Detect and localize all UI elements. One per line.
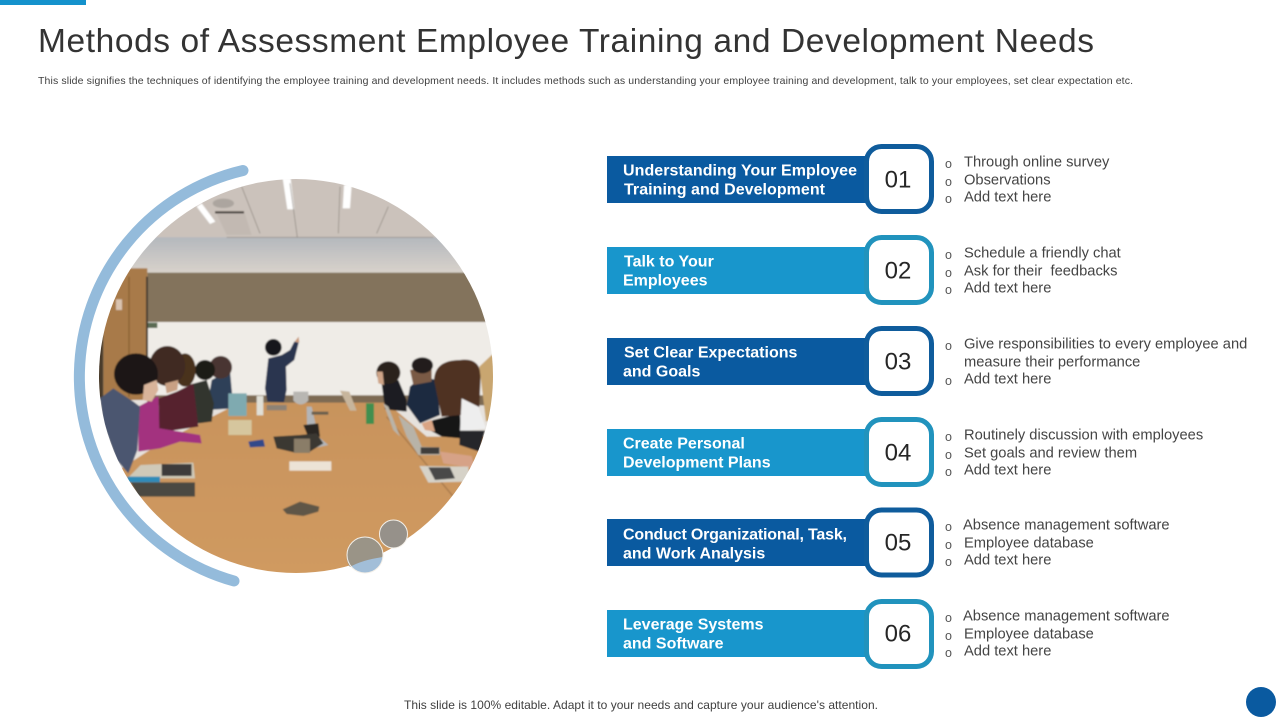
bullet list 6: Absence management software xyxy=(963,608,1170,624)
page marker dot xyxy=(1246,687,1276,717)
label bar 4 xyxy=(607,429,870,476)
subtitle: This slide signifies the techniques of identifying the employee training and development needs. It includes methods such as understanding your employee training and development, talk to your employees, set clear expectation etc. xyxy=(38,75,1133,87)
bullet list 3 xyxy=(945,336,1247,388)
bullet list 5: o xyxy=(945,520,952,534)
row 4 xyxy=(607,420,1203,484)
label bar 6 xyxy=(607,610,870,657)
label bar 6: and Software xyxy=(623,636,724,652)
bullet list 6 xyxy=(945,608,1170,660)
number box 03 xyxy=(866,328,932,394)
bullet list 2: Add text here xyxy=(964,280,1051,296)
bullet list 1 xyxy=(945,154,1110,206)
bullet list 3: measure their performance xyxy=(964,354,1140,370)
row 3 xyxy=(607,328,1247,394)
label bar 1 xyxy=(607,156,870,203)
label bar 3: Set Clear Expectations xyxy=(624,344,798,362)
items on table xyxy=(228,420,252,435)
bullet list 1: Observations xyxy=(964,172,1051,188)
label bar 2 xyxy=(607,247,870,294)
label bar 3: and Goals xyxy=(623,364,700,380)
bullet list 1: o xyxy=(945,175,952,189)
number box 04 xyxy=(866,420,932,484)
bullet list 6: Employee database xyxy=(964,626,1094,642)
label bar 5 xyxy=(607,519,870,566)
number box 06: 06 xyxy=(885,620,911,648)
bullet list 5: Absence management software xyxy=(963,517,1170,533)
label bar 3 xyxy=(607,338,870,385)
bullet list 2 xyxy=(945,245,1121,297)
bullet list 5 xyxy=(945,517,1170,569)
people right xyxy=(340,391,357,411)
number box 04: 04 xyxy=(885,440,911,466)
table xyxy=(122,402,484,573)
row 5 xyxy=(607,510,1170,575)
bullet list 2: o xyxy=(945,283,952,297)
bullet list 5: Employee database xyxy=(964,535,1094,551)
bullet list 3: Add text here xyxy=(964,371,1051,387)
row 1 xyxy=(607,146,1110,212)
title: Methods of Assessment Employee Training and Development Needs xyxy=(38,23,1094,60)
bullet list 3: Give responsibilities to every employee and xyxy=(964,336,1247,352)
people left xyxy=(208,372,233,410)
laptop left xyxy=(127,463,195,478)
number box 01: 01 xyxy=(885,166,911,194)
photo panel: meeting room xyxy=(79,170,500,583)
label bar 6: Leverage Systems xyxy=(623,616,764,634)
bullet list 1: Add text here xyxy=(964,189,1051,205)
label bar 4: Development Plans xyxy=(623,454,771,472)
bullet list 2: o xyxy=(945,248,952,262)
bullet list 4 xyxy=(945,427,1203,479)
number box 02 xyxy=(866,238,932,302)
label bar 4: Create Personal xyxy=(623,436,745,452)
decorative small circles xyxy=(347,520,408,573)
bullet list 4: o xyxy=(945,465,952,479)
bullet list 1: o xyxy=(945,192,952,206)
row 2 xyxy=(607,238,1121,302)
bullet list 3: o xyxy=(945,374,952,388)
bullet list 4: o xyxy=(945,430,952,444)
label bar 1: Training and Development xyxy=(624,182,826,198)
number box 05: 05 xyxy=(885,530,911,556)
bullet list 4: o xyxy=(945,448,952,462)
row 6 xyxy=(607,602,1170,666)
label bar 2: Employees xyxy=(623,272,708,290)
presenter xyxy=(265,342,299,402)
label bar 2: Talk to Your xyxy=(624,254,714,270)
bullet list 5: o xyxy=(945,555,952,569)
label bar 5: and Work Analysis xyxy=(623,546,765,562)
bullet list 1: o xyxy=(945,157,952,171)
bullet list 6: o xyxy=(945,646,952,660)
bullet list 3: o xyxy=(945,339,952,353)
label bar 1: Understanding Your Employee xyxy=(623,162,857,180)
label bar 5: Conduct Organizational, Task, xyxy=(623,526,847,544)
room xyxy=(100,399,488,468)
top accent bar xyxy=(0,0,86,5)
bullet list 6: Add text here xyxy=(964,643,1051,659)
number box 02: 02 xyxy=(885,258,911,284)
number box 01 xyxy=(866,146,932,212)
footer note: This slide is 100% editable. Adapt it to your needs and capture your audience's attention. xyxy=(404,698,878,712)
bullet list 2: Ask for their feedbacks xyxy=(964,263,1117,279)
bullet list 5: Add text here xyxy=(964,552,1051,568)
decorative arc xyxy=(79,170,243,581)
bullet list 4: Add text here xyxy=(964,462,1051,478)
photo: team meeting around table xyxy=(93,170,500,583)
bullet list 6: o xyxy=(945,629,952,643)
number box 06 xyxy=(866,602,932,666)
bullet list 2: Schedule a friendly chat xyxy=(964,245,1121,261)
bullet list 6: o xyxy=(945,611,952,625)
bullet list 2: o xyxy=(945,266,952,280)
number box 05 xyxy=(866,510,932,575)
bullet list 1: Through online survey xyxy=(964,154,1110,170)
bullet list 4: Routinely discussion with employees xyxy=(964,427,1203,443)
number box 03: 03 xyxy=(885,348,911,376)
bullet list 4: Set goals and review them xyxy=(964,445,1137,461)
bullet list 5: o xyxy=(945,538,952,552)
